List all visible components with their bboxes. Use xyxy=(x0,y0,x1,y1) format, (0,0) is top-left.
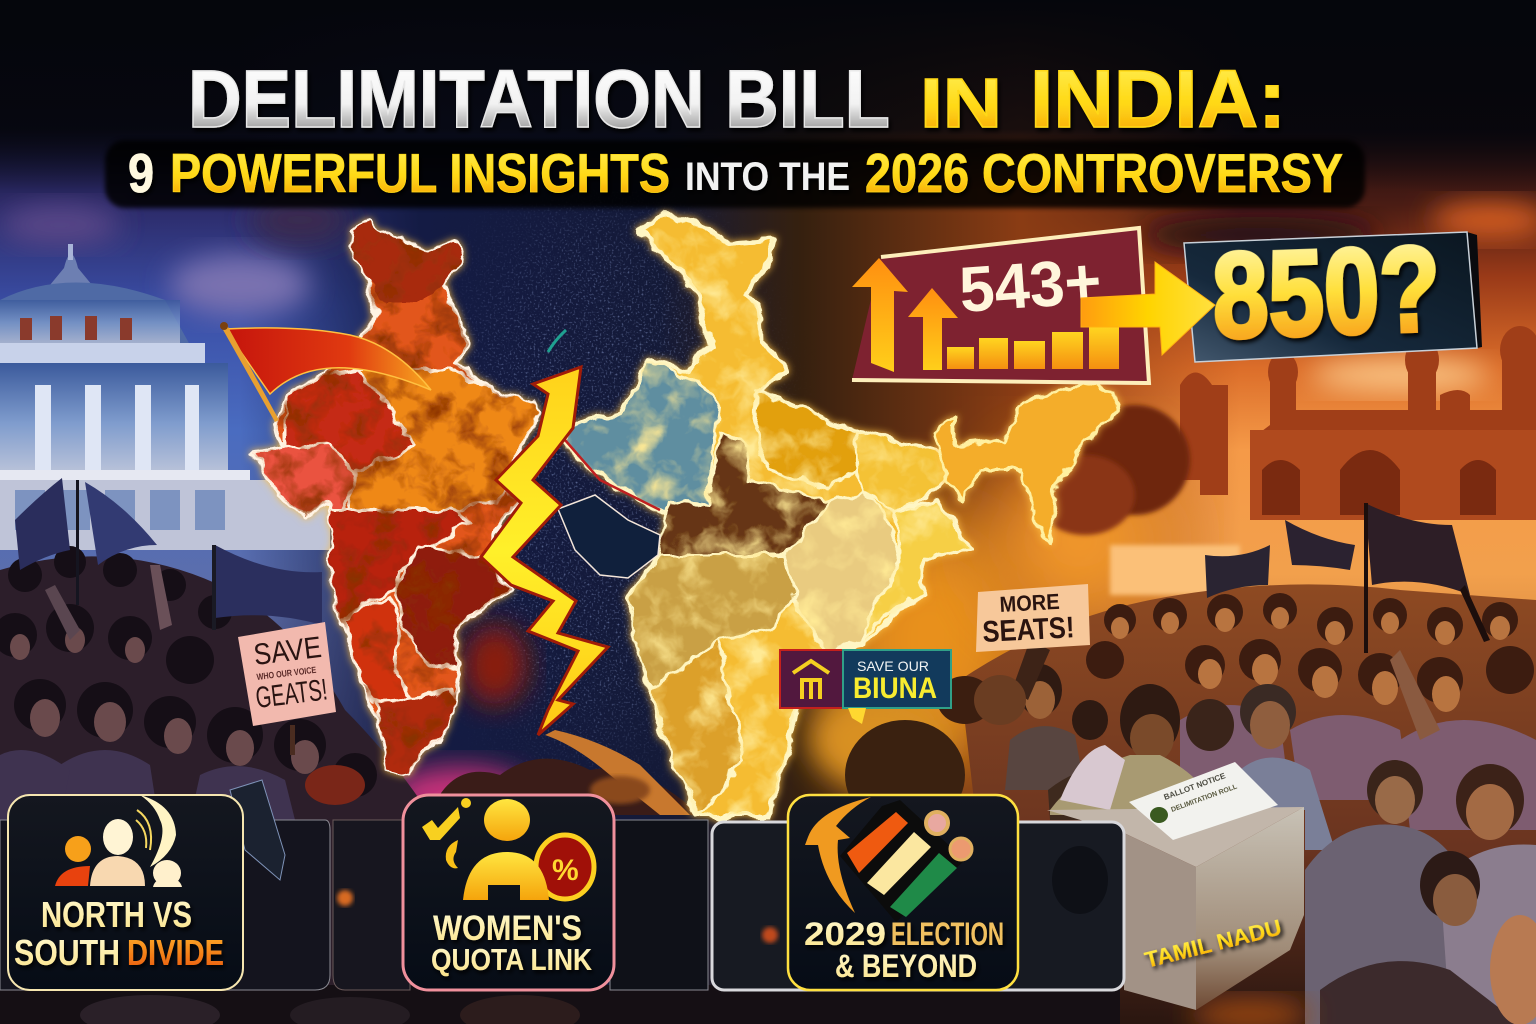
title line two: INTO THE xyxy=(685,155,850,199)
sign: save seats xyxy=(238,622,336,755)
dark central India cut region xyxy=(548,330,660,578)
icon: voting machine tricolour xyxy=(805,797,972,922)
map: yellow northern India xyxy=(560,210,980,820)
right building: silhouette palace xyxy=(1035,326,1536,595)
card: 2029 election and beyond: 2029 xyxy=(804,916,886,952)
title line two: 2026 CONTROVERSY xyxy=(865,142,1343,204)
seats stat panel: 543+: 543+ xyxy=(957,244,1104,326)
card: 2029 election and beyond: & BEYOND xyxy=(835,948,977,984)
title line two: 9 xyxy=(128,142,154,204)
card: women's quota link xyxy=(403,795,614,990)
title line two xyxy=(128,142,1343,204)
card: women's quota link: WOMEN'S xyxy=(433,909,582,948)
ballot paper: DELIMITATION ROLL xyxy=(1170,783,1239,814)
sign: save seats: WHO OUR VOICE xyxy=(256,665,317,682)
left building: domed parliament xyxy=(0,244,330,550)
subtitle shadow band xyxy=(105,140,1365,208)
card: women's quota link: QUOTA LINK xyxy=(431,942,593,977)
title line one: IN xyxy=(920,64,1002,142)
icon: woman with percent badge xyxy=(422,798,594,900)
left protest flags xyxy=(15,478,322,630)
icon: woman with percent badge: % xyxy=(552,854,579,887)
ballot paper: BALLOT NOTICE xyxy=(1163,771,1227,802)
title line two: POWERFUL INSIGHTS xyxy=(170,142,670,204)
up arrows xyxy=(852,258,958,372)
sign: more seats xyxy=(976,584,1090,652)
card: north vs south divide: NORTH VS xyxy=(41,894,192,935)
left protest crowd xyxy=(0,546,420,1024)
ballot paper xyxy=(1129,762,1278,840)
center foreground crowd and reaching arm xyxy=(430,730,700,815)
save our badge: SAVE OUR xyxy=(857,658,929,674)
bottom strip background xyxy=(0,780,1124,1024)
card: north vs south divide: DIVIDE xyxy=(127,932,224,973)
big arrow from 543 to 850 xyxy=(1081,262,1215,355)
card: north vs south divide: SOUTH xyxy=(14,932,120,973)
sign: save seats: GEATS! xyxy=(254,673,329,715)
map: northeast yellow fragment xyxy=(935,385,1120,545)
save our badge: BIUNA xyxy=(853,672,937,705)
title line one: INDIA: xyxy=(1030,54,1286,145)
card: north vs south divide xyxy=(8,795,243,990)
title line one: DELIMITATION BILL xyxy=(188,54,890,145)
ballot box xyxy=(1047,762,1304,1010)
sign: save seats: SAVE xyxy=(252,631,323,672)
map: red southern India xyxy=(240,220,550,780)
card: 2029 election and beyond xyxy=(788,795,1018,990)
card: 2029 election and beyond: ELECTION xyxy=(891,916,1004,952)
seats stat panel: 543+ xyxy=(852,228,1149,383)
icon: two groups divided xyxy=(55,795,182,887)
lightning bolt divider xyxy=(481,367,608,735)
right protest crowd xyxy=(845,584,1536,1024)
red flag on map xyxy=(220,322,431,422)
save our badge xyxy=(780,650,951,724)
sign: more seats: SEATS! xyxy=(982,611,1075,649)
title block xyxy=(105,54,1365,208)
seats stat panel: 850?: 850? xyxy=(1210,220,1443,364)
right protest flags xyxy=(1205,503,1490,653)
bars xyxy=(947,327,1119,369)
ballot box: TAMIL NADU xyxy=(1142,915,1284,973)
sign: more seats: MORE xyxy=(999,589,1060,617)
